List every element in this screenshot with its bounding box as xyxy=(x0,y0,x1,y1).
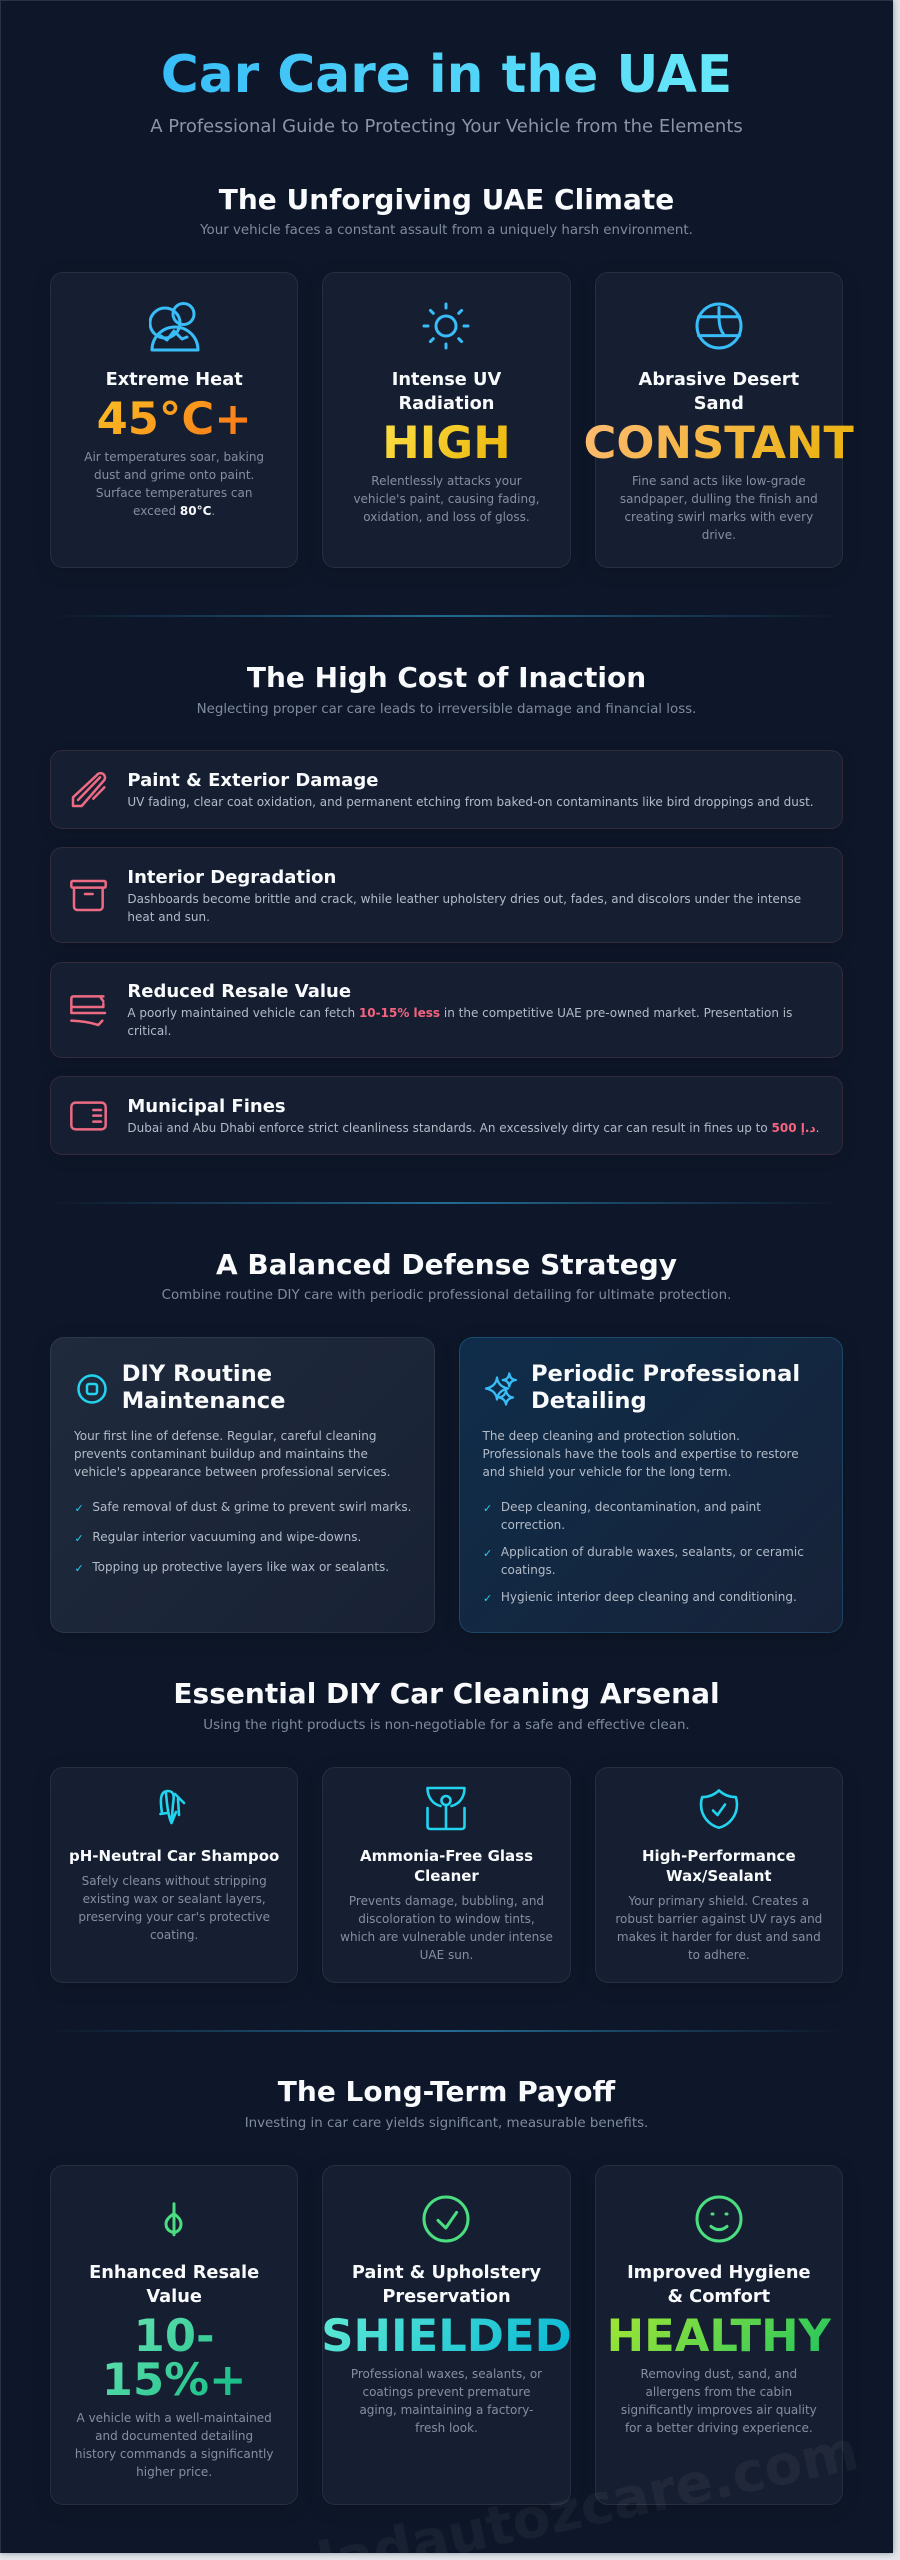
section description: climate: Your vehicle faces a constant assault from a uniquely harsh environment. xyxy=(200,223,693,238)
card text: to adhere. xyxy=(688,1948,750,1962)
card text xyxy=(620,474,818,542)
icon: sun xyxy=(422,302,470,350)
card text xyxy=(351,2367,542,2435)
checklist: coatings. xyxy=(501,1563,556,1577)
panel: hygiene xyxy=(595,2165,843,2505)
panel: professional detailing xyxy=(458,1337,843,1632)
panel: interior degradation xyxy=(50,847,843,943)
heading: cost: The High Cost of Inaction xyxy=(247,661,646,694)
checklist: correction. xyxy=(501,1518,565,1532)
section description: arsenal: Using the right products is non-negotiable for a safe and effective clean. xyxy=(203,1718,690,1733)
card text: preserving your car's protective xyxy=(78,1910,270,1924)
item text: A poorly maintained vehicle can fetch 10-15% less in the competitive UAE pre-owned market. Presentation is xyxy=(127,1006,792,1020)
checklist xyxy=(74,1500,411,1575)
checklist: ✓ xyxy=(74,1502,84,1515)
card title: Value xyxy=(146,2286,202,2307)
card text: makes it harder for dust and sand xyxy=(617,1930,821,1944)
card text: aging, maintaining a factory- xyxy=(359,2403,534,2417)
checklist: ✓ xyxy=(483,1502,492,1515)
stat: 10-15%+: 10- xyxy=(134,2309,215,2362)
card text xyxy=(84,450,264,518)
icon: smile xyxy=(696,2196,742,2242)
card title: pH-Neutral Car Shampoo xyxy=(69,1847,279,1865)
icon: shampoo xyxy=(159,1790,186,1824)
section description: cost: Neglecting proper car care leads to irreversible damage and financial loss. xyxy=(197,702,696,717)
panel text: Professionals have the tools and expertise to restore xyxy=(482,1447,799,1461)
panel: DIY routine xyxy=(50,1337,434,1632)
card text: Surface temperatures can xyxy=(96,486,252,500)
card text: fresh look. xyxy=(415,2421,478,2435)
card text: Your primary shield. Creates a xyxy=(628,1894,809,1908)
heading: arsenal: Essential DIY Car Cleaning Arsenal xyxy=(173,1677,720,1710)
panel heading: Periodic Professional xyxy=(531,1360,800,1386)
card text: coatings prevent premature xyxy=(362,2385,530,2399)
heading: strategy: A Balanced Defense Strategy xyxy=(216,1248,677,1281)
card text: vehicle's paint, causing fading, xyxy=(353,492,540,506)
panel: UV radiation xyxy=(322,272,571,568)
item text: Dashboards become brittle and crack, while leather upholstery dries out, fades, and discolors under the intense xyxy=(127,892,801,906)
card text: exceed 80°C. xyxy=(133,504,215,518)
card text: Air temperatures soar, baking xyxy=(84,450,264,464)
checklist: Application of durable waxes, sealants, or ceramic xyxy=(501,1545,804,1559)
card text: which are vulnerable under intense xyxy=(340,1930,553,1944)
stat: HEALTHY: HEALTHY xyxy=(607,2309,831,2362)
checklist: Safe removal of dust & grime to prevent swirl marks. xyxy=(92,1500,411,1514)
card text xyxy=(621,2367,817,2435)
card title xyxy=(642,1847,796,1885)
card title xyxy=(360,1847,533,1885)
card text xyxy=(78,1874,270,1942)
checklist: Hygienic interior deep cleaning and conditioning. xyxy=(501,1590,797,1604)
stat: SHIELDED: SHIELDED xyxy=(321,2309,572,2362)
card text: Professional waxes, sealants, or xyxy=(351,2367,542,2381)
card title: Wax/Sealant xyxy=(666,1867,772,1885)
item text: critical. xyxy=(127,1024,171,1038)
card text xyxy=(340,1894,553,1962)
card text: dust and grime onto paint. xyxy=(94,468,254,482)
item text: heat and sun. xyxy=(127,910,210,924)
icon: archive box xyxy=(70,880,107,912)
panel: glass cleaner xyxy=(322,1767,571,1983)
card text xyxy=(75,2411,273,2479)
card text: Safely cleans without stripping xyxy=(82,1874,267,1888)
card title xyxy=(627,2262,811,2307)
card text: Relentlessly attacks your xyxy=(371,474,522,488)
card title: & Comfort xyxy=(667,2286,770,2307)
panel: municipal fines xyxy=(50,1076,843,1155)
card title xyxy=(392,369,502,414)
checklist xyxy=(483,1500,804,1605)
title: Car Care in the UAE xyxy=(161,45,732,105)
item title: Paint & Exterior Damage xyxy=(127,770,378,790)
panel: extreme heat xyxy=(50,272,298,568)
card text: robust barrier against UV rays and xyxy=(615,1912,822,1926)
icon: shield check xyxy=(700,1789,738,1829)
panel heading: Maintenance xyxy=(122,1388,286,1414)
item text xyxy=(127,1006,792,1038)
icon: sparkles xyxy=(484,1372,517,1406)
panel text xyxy=(74,1429,390,1479)
panel: resale value xyxy=(50,962,843,1058)
card title: Improved Hygiene xyxy=(627,2262,811,2283)
panel text: The deep cleaning and protection solution. xyxy=(482,1429,740,1443)
icon: fine card xyxy=(70,1101,107,1131)
card text: and documented detailing xyxy=(95,2429,253,2443)
panel heading xyxy=(531,1360,800,1414)
subtitle: A Professional Guide to Protecting Your Vehicle from the Elements xyxy=(150,116,743,137)
stat: CONSTANT: CONSTANT xyxy=(584,416,854,469)
icon: heat xyxy=(149,302,200,352)
icon: target xyxy=(77,1374,107,1404)
item text: Dubai and Abu Dhabi enforce strict cleanliness standards. An excessively dirty car can result in fines up to 500 د.إ. xyxy=(127,1120,819,1134)
card text: existing wax or sealant layers, xyxy=(83,1892,266,1906)
heading: payoff: The Long-Term Payoff xyxy=(278,2075,615,2108)
item text xyxy=(127,892,801,924)
card text: significantly improves air quality xyxy=(621,2403,817,2417)
panel: wax sealant xyxy=(595,1767,843,1983)
card title: Sand xyxy=(694,393,744,414)
card title xyxy=(89,2262,259,2307)
panel: shampoo xyxy=(50,1767,298,1983)
icon: pencil xyxy=(72,772,106,808)
card text: UAE sun. xyxy=(420,1948,473,1962)
panel heading: DIY Routine xyxy=(122,1360,272,1386)
card text xyxy=(353,474,540,524)
card title xyxy=(352,2262,541,2307)
checklist: ✓ xyxy=(483,1592,492,1605)
icon: glass cleaner xyxy=(426,1786,466,1830)
item text: UV fading, clear coat oxidation, and permanent etching from baked-on contaminants like bird droppings and dust. xyxy=(127,794,814,808)
stat: HIGH: HIGH xyxy=(382,416,511,469)
checklist: ✓ xyxy=(74,1532,84,1545)
card title: Extreme Heat xyxy=(106,369,243,390)
panel text: and shield your vehicle for the long term. xyxy=(482,1465,731,1479)
panel heading xyxy=(122,1360,286,1414)
card title: Abrasive Desert xyxy=(639,369,799,390)
card text: discoloration to window tints, xyxy=(358,1912,535,1926)
checklist: Topping up protective layers like wax or sealants. xyxy=(92,1560,389,1574)
card text: Prevents damage, bubbling, and xyxy=(349,1894,544,1908)
panel: resale xyxy=(50,2165,298,2505)
panel: paint damage xyxy=(50,750,843,829)
item title: Reduced Resale Value xyxy=(127,981,351,1002)
panel text: vehicle's appearance between professional services. xyxy=(74,1465,390,1479)
card text: allergens from the cabin xyxy=(646,2385,792,2399)
card title: Ammonia-Free Glass xyxy=(360,1847,533,1865)
panel heading: Detailing xyxy=(531,1388,647,1414)
card title: Cleaner xyxy=(414,1867,479,1885)
card text: history commands a significantly xyxy=(75,2447,273,2461)
card text: creating swirl marks with every xyxy=(624,510,813,524)
panel: preservation xyxy=(322,2165,571,2505)
card title: Enhanced Resale xyxy=(89,2262,259,2283)
checklist: ✓ xyxy=(483,1547,492,1560)
stat: 45°C+: 45°C+ xyxy=(97,392,252,445)
item title: Interior Degradation xyxy=(127,866,336,888)
card title: High-Performance xyxy=(642,1847,796,1865)
card text: for a better driving experience. xyxy=(625,2421,813,2435)
panel text: prevents contaminant buildup and maintains the xyxy=(74,1447,368,1461)
stat: 10-15%+: 15%+ xyxy=(102,2353,247,2406)
card title: Preservation xyxy=(382,2286,511,2307)
section description: strategy: Combine routine DIY care with periodic professional detailing for ultimate protection. xyxy=(162,1288,731,1303)
card text: A vehicle with a well-maintained xyxy=(77,2411,272,2425)
card text xyxy=(615,1894,822,1962)
checklist: ✓ xyxy=(74,1562,84,1575)
item title: Municipal Fines xyxy=(127,1096,286,1116)
card title: Paint & Upholstery xyxy=(352,2262,541,2283)
card text: drive. xyxy=(702,528,736,542)
heading: climate: The Unforgiving UAE Climate xyxy=(219,183,674,216)
card text: coating. xyxy=(150,1928,198,1942)
card title xyxy=(638,369,799,414)
checklist: Regular interior vacuuming and wipe-downs. xyxy=(92,1530,361,1544)
checklist: Deep cleaning, decontamination, and paint xyxy=(501,1500,761,1514)
icon: currency xyxy=(164,2202,182,2236)
card text: Removing dust, sand, and xyxy=(641,2367,797,2381)
panel text: Your first line of defense. Regular, careful cleaning xyxy=(74,1429,376,1443)
icon: globe xyxy=(696,302,742,350)
card title: Radiation xyxy=(398,393,494,414)
card text: sandpaper, dulling the finish and xyxy=(620,492,818,506)
stat: 10-15%+ xyxy=(102,2314,247,2403)
section description: payoff: Investing in car care yields significant, measurable benefits. xyxy=(245,2116,648,2131)
panel text xyxy=(482,1429,799,1479)
icon: stacked book xyxy=(70,995,106,1026)
card text: Fine sand acts like low-grade xyxy=(632,474,806,488)
card text: oxidation, and loss of gloss. xyxy=(363,510,530,524)
card title: Intense UV xyxy=(392,369,501,390)
icon: check circle xyxy=(422,2196,470,2242)
panel: desert sand xyxy=(595,272,843,568)
card text: higher price. xyxy=(136,2465,212,2479)
